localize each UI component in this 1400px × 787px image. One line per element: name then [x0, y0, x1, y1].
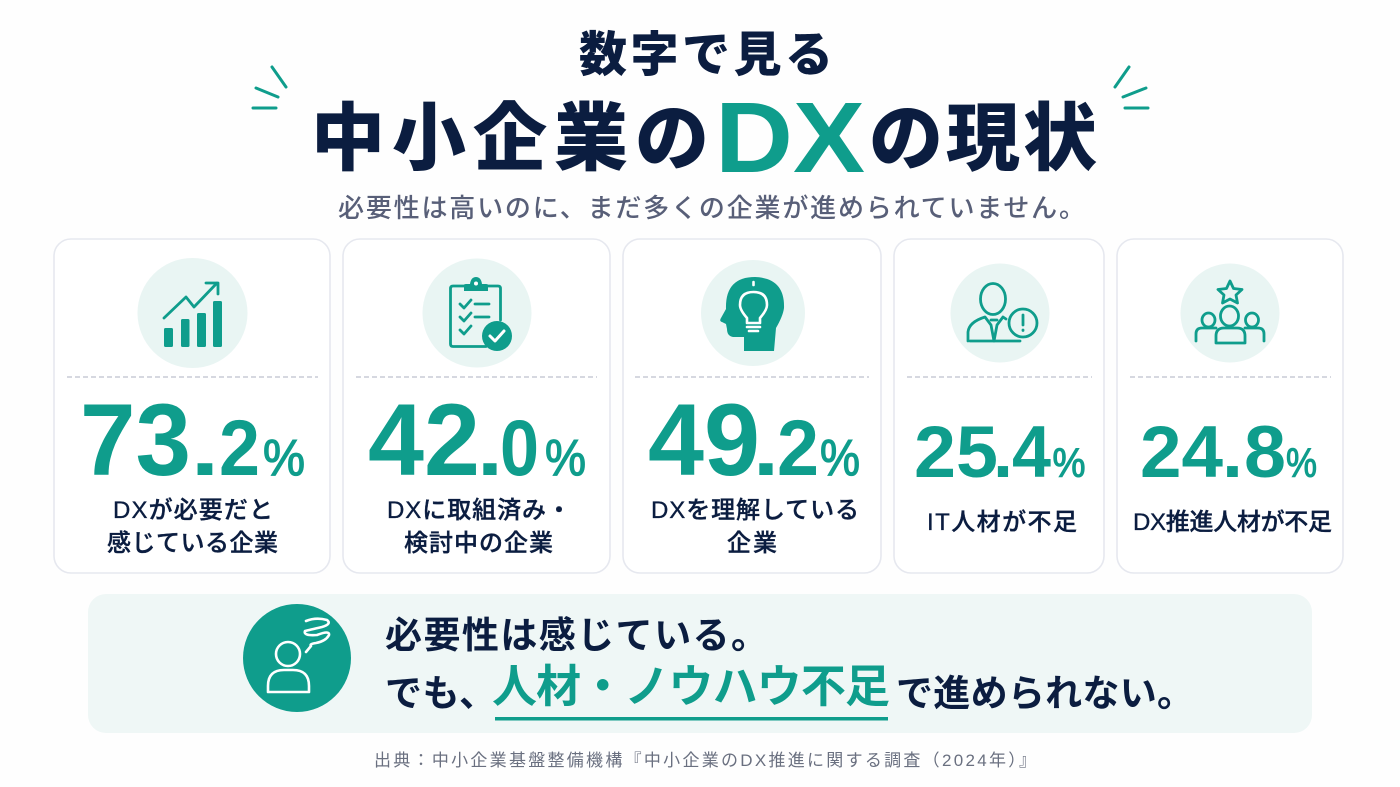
stat: 73.2%: 2	[219, 403, 260, 492]
title: second line: の現状	[869, 97, 1097, 180]
sparkle accents right	[1115, 67, 1148, 108]
icon: clipboard checklist	[422, 258, 532, 368]
message line 2	[385, 661, 1194, 720]
stat: 42.0%: %	[545, 429, 586, 486]
stat: 24.8%: 8	[1244, 412, 1286, 493]
label: 検討中の企業	[404, 530, 553, 557]
label	[107, 497, 278, 557]
label: 感じている企業	[107, 529, 278, 557]
title: second line: 中小企業の	[311, 97, 709, 180]
panel: conclusion banner	[88, 594, 1312, 733]
panel: DX understanding card	[623, 239, 881, 573]
highlighted phrase: 人材・ノウハウ不足	[492, 661, 890, 712]
stat: 24.8%: %	[1286, 440, 1317, 486]
label	[387, 497, 571, 557]
stat: 49.2%: 2	[777, 403, 819, 492]
sparkle accents left	[253, 67, 286, 108]
message line 1: 必要性は感じている。	[385, 615, 768, 656]
stat: 42.0%: 0	[500, 403, 539, 492]
stat: 42.0%: .	[477, 403, 503, 492]
panel: IT talent shortage card	[894, 239, 1104, 573]
title: first line: 数字で見る	[579, 29, 833, 82]
stat: 49.2%	[648, 383, 860, 497]
stat: 24.8%	[1140, 412, 1317, 493]
stat: 42.0%: 42	[368, 383, 480, 497]
stat: 25.4%	[914, 412, 1086, 493]
panel: DX in progress card	[343, 239, 610, 573]
label: IT人材が不足	[927, 509, 1077, 536]
title: second line: DX	[715, 82, 865, 194]
message line 2: でも、	[385, 673, 496, 714]
icon: businessperson with alert	[950, 264, 1050, 362]
stat: 73.2%: %	[263, 429, 305, 486]
stat: 49.2%: %	[820, 429, 860, 486]
source note: 出典：中小企業基盤整備機構『中小企業のDX推進に関する調査（2024年）』	[374, 751, 1036, 770]
label	[651, 497, 859, 557]
stat: 24.8%: 24	[1140, 412, 1223, 493]
stat: 25.4%: .	[993, 412, 1013, 493]
stat: 42.0%	[368, 383, 586, 497]
subtitle: 必要性は高いのに、まだ多くの企業が進められていません。	[338, 193, 1085, 223]
stat: 73.2%	[80, 383, 305, 497]
title block	[311, 29, 1097, 223]
stat: 25.4%: 4	[1012, 412, 1051, 493]
message line 2: で進められない。	[896, 673, 1194, 714]
stat: 73.2%: 73	[80, 383, 191, 497]
stat: 25.4%: %	[1052, 440, 1086, 486]
icon: team with star	[1180, 264, 1280, 362]
title: second line	[311, 82, 1097, 194]
panel: DX talent shortage card	[1117, 239, 1343, 573]
icon: head with lightbulb	[701, 260, 805, 366]
label: DXに取組済み・	[387, 497, 571, 524]
label: 企業	[727, 530, 777, 557]
stat: 24.8%: .	[1222, 412, 1243, 493]
stat: 49.2%: .	[753, 403, 779, 492]
stat: 49.2%: 49	[648, 383, 760, 497]
icon: rising bar chart	[138, 258, 248, 368]
panel: DX necessity card	[54, 239, 330, 573]
label: DXを理解している	[651, 497, 859, 524]
label: DX推進人材が不足	[1133, 509, 1332, 536]
stat: 25.4%: 25	[914, 412, 998, 493]
stat: 73.2%: .	[190, 403, 220, 492]
icon: confused person	[243, 604, 351, 712]
label: DXが必要だと	[113, 497, 273, 524]
